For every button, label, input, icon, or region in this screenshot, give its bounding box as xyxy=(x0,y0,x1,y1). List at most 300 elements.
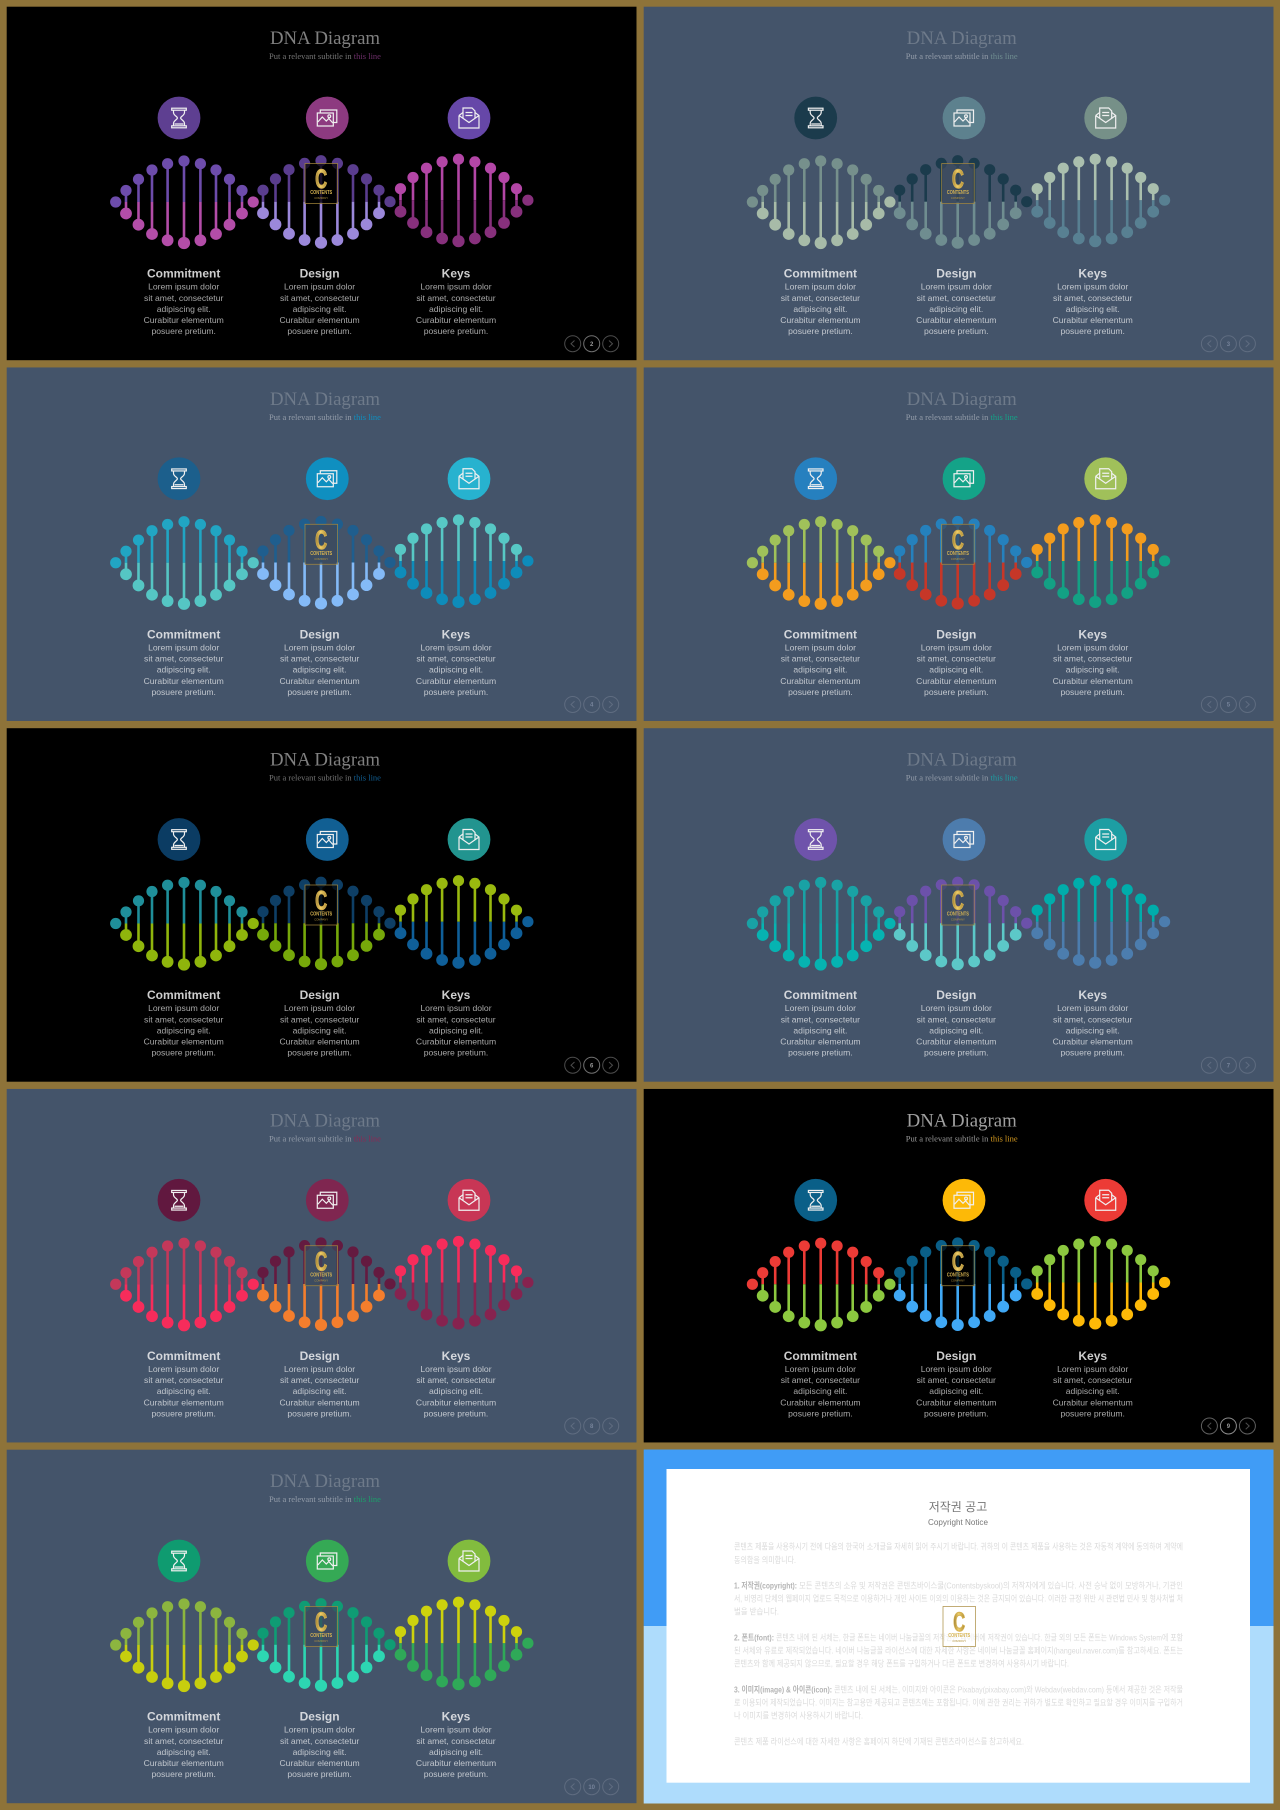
text block: Design: adipiscing elit. xyxy=(293,1747,347,1757)
subtitle: Put a relevant subtitle in this line xyxy=(269,1494,381,1504)
subtitle: Put a relevant subtitle in this line xyxy=(906,1133,1018,1143)
icon: envelope xyxy=(1084,818,1127,861)
text block: Commitment: sit amet, consectetur xyxy=(144,1736,223,1746)
DNA helix 1 xyxy=(110,1238,259,1331)
text block: Keys: sit amet, consectetur xyxy=(1053,293,1132,303)
text block: Keys: adipiscing elit. xyxy=(1066,1386,1120,1396)
text block: Keys: Keys xyxy=(1078,988,1107,1002)
text block: Commitment: Curabitur elementum xyxy=(144,1036,224,1046)
text block: Commitment: Commitment xyxy=(147,988,220,1002)
icon: picture xyxy=(943,457,985,500)
text block: Commitment: adipiscing elit. xyxy=(793,304,847,314)
icon: picture xyxy=(943,97,985,139)
text block: Commitment: Commitment xyxy=(784,1349,857,1363)
subtitle: Put a relevant subtitle in this line xyxy=(906,412,1018,422)
text block: Commitment: Curabitur elementum xyxy=(780,315,861,325)
notice section 3: 3. 이미지(image) & 아이콘(icon): xyxy=(734,1684,832,1694)
notice section 3: 나 이미지를 변경하여 사용하시기 바랍니다. xyxy=(734,1710,863,1720)
subtitle: Put a relevant subtitle in this line xyxy=(269,412,381,422)
text block: Design: sit amet, consectetur xyxy=(917,1014,996,1024)
text block: Commitment: posuere pretium. xyxy=(788,1048,853,1058)
text block: Design: Curabitur elementum xyxy=(916,1036,996,1046)
logo xyxy=(305,885,338,925)
text block: Design: adipiscing elit. xyxy=(929,1386,983,1396)
text block: Commitment: Commitment xyxy=(147,266,220,280)
text block: Keys: Keys xyxy=(442,1349,471,1363)
text block: Commitment: Commitment xyxy=(147,1710,220,1724)
panel: copyright notice xyxy=(644,1450,1274,1804)
icon: picture xyxy=(306,1540,349,1582)
panel: purple on black xyxy=(7,7,636,360)
DNA helix 3 xyxy=(1031,1236,1170,1330)
DNA helix 3 xyxy=(395,1597,534,1690)
text block: Design: Design xyxy=(936,266,976,280)
notice sheet xyxy=(666,1469,1250,1783)
subtitle: Put a relevant subtitle in this line xyxy=(269,51,381,61)
text block: Keys: posuere pretium. xyxy=(424,326,488,336)
text block: Design: sit amet, consectetur xyxy=(280,1736,359,1746)
page navigation: 2 xyxy=(590,342,594,348)
text block: Commitment: Curabitur elementum xyxy=(780,676,861,686)
text block: Design: posuere pretium. xyxy=(287,687,352,697)
text block: Design: adipiscing elit. xyxy=(929,304,983,314)
DNA helix 1 xyxy=(747,877,896,971)
text block: Keys: Keys xyxy=(442,1710,471,1724)
text block: Commitment xyxy=(780,266,861,336)
text block: Keys: Keys xyxy=(1078,1349,1107,1363)
text block: Keys: Keys xyxy=(1078,266,1107,280)
text block: Keys: Lorem ipsum dolor xyxy=(420,1364,492,1374)
text block: Keys: Lorem ipsum dolor xyxy=(1057,282,1128,292)
text block: Design: adipiscing elit. xyxy=(293,304,347,314)
text block: Commitment: adipiscing elit. xyxy=(793,1025,847,1035)
text block: Design xyxy=(279,266,360,336)
icon: hourglass xyxy=(794,97,837,139)
logo xyxy=(943,1606,976,1646)
subtitle: Put a relevant subtitle in this line xyxy=(269,772,381,782)
text block: Keys: Curabitur elementum xyxy=(1053,1397,1133,1407)
text block: Keys: Curabitur elementum xyxy=(1053,315,1133,325)
icon: envelope xyxy=(1084,97,1127,139)
text block: Keys xyxy=(1053,627,1133,697)
text block: Keys: Curabitur elementum xyxy=(416,315,496,325)
page navigation xyxy=(1201,696,1255,712)
icon: hourglass xyxy=(158,457,200,500)
text block: Keys: Curabitur elementum xyxy=(416,676,496,686)
text block: Commitment: Lorem ipsum dolor xyxy=(785,1003,856,1013)
page navigation xyxy=(1201,1418,1255,1434)
text block: Commitment: Commitment xyxy=(784,988,857,1002)
subtitle: Put a relevant subtitle in this line xyxy=(269,1133,381,1143)
icon: hourglass xyxy=(794,457,837,500)
text block: Design xyxy=(916,266,996,336)
text block: Design: sit amet, consectetur xyxy=(280,293,359,303)
DNA helix 2 xyxy=(894,155,1032,249)
page navigation xyxy=(565,1057,619,1073)
DNA helix 3 xyxy=(1031,514,1170,608)
text block: Keys: adipiscing elit. xyxy=(1066,304,1120,314)
text block: Design: sit amet, consectetur xyxy=(917,293,996,303)
page navigation xyxy=(565,336,619,352)
text block: Keys: posuere pretium. xyxy=(424,1769,488,1779)
text block: Design: Design xyxy=(300,988,340,1002)
notice section 1: 모든 콘텐츠의 소유 및 저작권은 콘텐츠바이스쿨(Contentsbyskool)의 저작자에게 있습니다. 사전 승낙 없이 모방하거나, 기관인 xyxy=(799,1581,1183,1591)
text block: Keys: sit amet, consectetur xyxy=(1053,654,1132,664)
text block: Commitment: adipiscing elit. xyxy=(793,665,847,675)
page navigation: 4 xyxy=(590,703,594,709)
text block: Commitment xyxy=(144,1710,224,1779)
text block: Keys: sit amet, consectetur xyxy=(416,1375,496,1385)
notice section 2: 2. 폰트(font): xyxy=(734,1632,774,1642)
text block: Design: adipiscing elit. xyxy=(929,1025,983,1035)
text block: Keys: Keys xyxy=(442,627,471,641)
DNA helix 2 xyxy=(894,516,1032,610)
notice section 1 xyxy=(734,1581,1183,1617)
title: DNA Diagram xyxy=(907,389,1017,410)
text block: Design: adipiscing elit. xyxy=(293,1025,347,1035)
panel: cyan on slate xyxy=(7,367,636,721)
text block: Design: Design xyxy=(300,266,340,280)
title: DNA Diagram xyxy=(270,389,380,410)
logo xyxy=(305,1246,338,1286)
text block: Design: posuere pretium. xyxy=(287,326,352,336)
text block: Commitment xyxy=(144,266,224,336)
icon: envelope xyxy=(448,1540,490,1582)
text block: Design xyxy=(279,1349,360,1418)
notice intro: 콘텐츠 제품을 사용하시기 전에 다음의 한국어 소개글을 자세히 읽어 주시기 바랍니다. 귀하의 이 콘텐츠 제품을 사용하는 것은 자동적 계약에 동의하여 계약에 xyxy=(734,1542,1183,1552)
notice section 2 xyxy=(734,1632,1183,1668)
DNA helix 2 xyxy=(894,877,1032,970)
DNA helix 1 xyxy=(110,155,259,249)
text block: Keys: posuere pretium. xyxy=(424,1048,488,1058)
text block: Design xyxy=(916,1349,996,1418)
text block: Design: posuere pretium. xyxy=(924,687,989,697)
logo xyxy=(942,885,974,925)
text block: Keys: Lorem ipsum dolor xyxy=(420,1725,492,1735)
notice title: 저작권 공고 xyxy=(929,1500,987,1514)
text block: Design: sit amet, consectetur xyxy=(280,1375,359,1385)
text block: Commitment: sit amet, consectetur xyxy=(144,654,223,664)
text block: Keys: Lorem ipsum dolor xyxy=(420,282,492,292)
text block: Keys: Curabitur elementum xyxy=(416,1758,496,1768)
text block: Keys xyxy=(416,1349,496,1418)
icon: picture xyxy=(306,457,349,500)
text block: Design: Curabitur elementum xyxy=(916,315,996,325)
title: DNA Diagram xyxy=(270,1110,380,1131)
DNA helix 1 xyxy=(747,516,896,610)
text block: Design: posuere pretium. xyxy=(287,1408,352,1418)
text block: Commitment: Lorem ipsum dolor xyxy=(785,1364,856,1374)
text block: Design: posuere pretium. xyxy=(924,326,989,336)
icon: picture xyxy=(943,818,985,861)
text block: Design: sit amet, consectetur xyxy=(280,654,359,664)
DNA helix 2 xyxy=(257,877,396,970)
text block: Keys: Curabitur elementum xyxy=(1053,676,1133,686)
text block: Commitment: Lorem ipsum dolor xyxy=(148,1003,219,1013)
text block: Design: posuere pretium. xyxy=(924,1408,989,1418)
text block: Design xyxy=(279,627,360,697)
text block: Commitment xyxy=(780,1349,861,1418)
text block: Commitment: posuere pretium. xyxy=(151,1048,216,1058)
text block: Keys: Curabitur elementum xyxy=(416,1397,496,1407)
text block: Commitment xyxy=(144,627,224,697)
logo xyxy=(942,524,974,564)
text block: Keys: adipiscing elit. xyxy=(429,1025,483,1035)
logo xyxy=(942,1246,974,1286)
text block: Keys: sit amet, consectetur xyxy=(1053,1014,1132,1024)
text block: Commitment: Curabitur elementum xyxy=(780,1397,861,1407)
page navigation: 8 xyxy=(590,1424,594,1430)
text block: Keys: posuere pretium. xyxy=(1060,687,1125,697)
page navigation: 10 xyxy=(588,1785,596,1791)
page navigation: 6 xyxy=(590,1063,594,1069)
text block: Design: Lorem ipsum dolor xyxy=(921,1003,992,1013)
text block: Design: Design xyxy=(300,1349,340,1363)
notice intro xyxy=(734,1542,1183,1565)
DNA helix 3 xyxy=(395,514,534,608)
icon: envelope xyxy=(448,1179,490,1222)
text block: Keys xyxy=(416,627,496,697)
icon: hourglass xyxy=(158,97,200,139)
text block: Keys xyxy=(1053,1349,1133,1418)
text block: Keys: adipiscing elit. xyxy=(429,1747,483,1757)
text block: Keys: Lorem ipsum dolor xyxy=(1057,1364,1128,1374)
text block: Design: Design xyxy=(936,627,976,641)
text block: Commitment: adipiscing elit. xyxy=(157,1386,211,1396)
text block: Commitment: adipiscing elit. xyxy=(157,1025,211,1035)
title: DNA Diagram xyxy=(907,1110,1017,1131)
text block: Keys: Lorem ipsum dolor xyxy=(420,642,492,652)
icon: picture xyxy=(943,1179,985,1222)
DNA helix 1 xyxy=(110,516,259,610)
logo xyxy=(305,524,338,564)
panel: teal and lime on black xyxy=(7,728,636,1082)
text block: Keys xyxy=(1053,988,1133,1058)
title: DNA Diagram xyxy=(907,28,1017,49)
text block: Design xyxy=(279,988,360,1058)
text block: Keys xyxy=(1053,266,1133,336)
icon: hourglass xyxy=(158,818,200,861)
icon: hourglass xyxy=(158,1540,200,1582)
page navigation xyxy=(1201,1057,1255,1073)
text block: Commitment: posuere pretium. xyxy=(151,1408,216,1418)
page navigation xyxy=(1201,336,1255,352)
text block: Keys: Curabitur elementum xyxy=(416,1036,496,1046)
text block: Commitment: Commitment xyxy=(147,627,220,641)
text block: Commitment: sit amet, consectetur xyxy=(144,1375,223,1385)
text block: Commitment: Curabitur elementum xyxy=(780,1036,861,1046)
text block: Design: adipiscing elit. xyxy=(293,665,347,675)
text block: Design: Design xyxy=(300,1710,340,1724)
text block: Commitment: posuere pretium. xyxy=(151,687,216,697)
title: DNA Diagram xyxy=(907,750,1017,770)
notice section 2: 콘텐츠 내에 된 서체는, 한글 폰트는 네이버 나눔글꼴의 저작권은 네이버에 저작권이 있습니다. 한글 외의 모든 폰트는 Windows System에 포함 xyxy=(776,1632,1183,1642)
icon: hourglass xyxy=(158,1179,200,1222)
text block: Commitment: Lorem ipsum dolor xyxy=(148,282,219,292)
subtitle: Put a relevant subtitle in this line xyxy=(906,772,1018,782)
text block: Commitment: sit amet, consectetur xyxy=(144,293,223,303)
text block: Commitment: posuere pretium. xyxy=(788,326,853,336)
text block: Keys xyxy=(416,1710,496,1779)
page navigation xyxy=(565,1418,619,1434)
text block: Commitment: posuere pretium. xyxy=(151,1769,216,1779)
text block: Keys: sit amet, consectetur xyxy=(416,1014,496,1024)
text block: Design: Lorem ipsum dolor xyxy=(284,1725,355,1735)
text block: Keys: Lorem ipsum dolor xyxy=(1057,642,1128,652)
title: DNA Diagram xyxy=(270,1471,380,1492)
text block: Commitment: posuere pretium. xyxy=(151,326,216,336)
DNA helix 3 xyxy=(1031,154,1170,247)
page navigation xyxy=(565,1779,619,1795)
text block: Design: sit amet, consectetur xyxy=(917,654,996,664)
notice subtitle: Copyright Notice xyxy=(928,1517,988,1527)
text block: Keys xyxy=(416,266,496,336)
text block: Keys: Keys xyxy=(442,988,471,1002)
text block: Commitment: sit amet, consectetur xyxy=(144,1014,223,1024)
icon: picture xyxy=(306,1179,349,1222)
notice section 1: 서, 비영리 단체의 웹페이지 업로드 목적으로 이용하거나 개인 사이트 이외의 이용하는 것은 금지되어 있습니다. 이러한 규정 위반 시 관련법 민사 및 형사처벌 처 xyxy=(734,1593,1183,1603)
DNA helix 3 xyxy=(395,154,534,247)
text block: Keys: Curabitur elementum xyxy=(1053,1036,1133,1046)
text block: Commitment: Lorem ipsum dolor xyxy=(148,1364,219,1374)
icon: hourglass xyxy=(794,1179,837,1222)
DNA helix 1 xyxy=(747,155,896,249)
panel: violet and teal on slate xyxy=(644,728,1274,1082)
text block: Commitment xyxy=(780,627,861,697)
text block: Commitment: sit amet, consectetur xyxy=(781,1014,860,1024)
page navigation: 5 xyxy=(1227,703,1231,709)
DNA helix 1 xyxy=(110,1598,259,1692)
text block: Design: Design xyxy=(300,627,340,641)
text block: Keys: posuere pretium. xyxy=(1060,1408,1125,1418)
text block: Keys: adipiscing elit. xyxy=(1066,665,1120,675)
text block: Keys: sit amet, consectetur xyxy=(416,293,496,303)
icon: picture xyxy=(306,818,349,861)
text block: Design: Lorem ipsum dolor xyxy=(284,642,355,652)
logo xyxy=(305,1606,338,1646)
text block: Design: sit amet, consectetur xyxy=(917,1375,996,1385)
DNA helix 1 xyxy=(747,1238,896,1331)
text block: Commitment: Commitment xyxy=(147,1349,220,1363)
text block: Commitment: adipiscing elit. xyxy=(157,1747,211,1757)
text block: Design: Lorem ipsum dolor xyxy=(921,642,992,652)
text block: Design: adipiscing elit. xyxy=(293,1386,347,1396)
text block: Commitment: Curabitur elementum xyxy=(144,315,224,325)
text block: Commitment: adipiscing elit. xyxy=(157,304,211,314)
DNA helix 3 xyxy=(1031,875,1170,969)
text block: Design: posuere pretium. xyxy=(287,1048,352,1058)
notice section 3: 로 이용되어 제작되었습니다. 이미지는 참고용만 제공되고 콘텐츠에는 포함됩니다. 이에 관한 권리는 귀하가 별도로 확인하고 필요할 경우 이미지를 구입하거 xyxy=(734,1698,1183,1708)
DNA helix 2 xyxy=(894,1237,1032,1331)
icon: envelope xyxy=(448,818,490,861)
notice section 3: 콘텐츠 내에 된 서체는, 이미지와 아이콘은 Pixabay(pixabay.com)와 Webdav(webdav.com) 등에서 제공한 것은 저작물 xyxy=(834,1684,1183,1694)
text block: Keys: posuere pretium. xyxy=(424,1408,488,1418)
notice section 2: 콘텐츠와 함께 제공되지 않으므로, 필요할 경우 해당 폰트를 구입하거나 다른 폰트로 변경하여 사용하시기 바랍니다. xyxy=(734,1658,1069,1668)
panel: green on slate xyxy=(7,1450,636,1803)
notice section 2: 된 서체와 유료로 제작되었습니다. 네이버 나눔글꼴 라이선스에 대한 자세한 사항은 네이버 나눔글꼴 홈페이지(hangeul.naver.com)를 참고하세요. 폰트는 xyxy=(734,1646,1183,1656)
text block: Design: Lorem ipsum dolor xyxy=(284,1003,355,1013)
text block: Design: Curabitur elementum xyxy=(916,1397,996,1407)
DNA helix 2 xyxy=(257,1237,396,1331)
text block: Keys: Keys xyxy=(1078,627,1107,641)
page navigation: 7 xyxy=(1227,1063,1231,1069)
icon: hourglass xyxy=(794,818,837,861)
text block: Design: Lorem ipsum dolor xyxy=(284,282,355,292)
text block: Keys: posuere pretium. xyxy=(1060,326,1125,336)
panel: sage on slate xyxy=(644,7,1274,360)
text block: Keys: adipiscing elit. xyxy=(429,304,483,314)
text block: Keys: sit amet, consectetur xyxy=(1053,1375,1132,1385)
text block: Commitment xyxy=(780,988,861,1058)
text block: Design: Curabitur elementum xyxy=(916,676,996,686)
icon: envelope xyxy=(1084,1179,1127,1222)
text block: Keys: sit amet, consectetur xyxy=(416,654,496,664)
page navigation xyxy=(565,696,619,712)
text block: Design: Curabitur elementum xyxy=(279,676,360,686)
title: DNA Diagram xyxy=(270,28,380,49)
text block: Commitment: adipiscing elit. xyxy=(157,665,211,675)
icon: envelope xyxy=(448,97,490,139)
text block: Commitment: posuere pretium. xyxy=(788,1408,853,1418)
text block: Commitment: adipiscing elit. xyxy=(793,1386,847,1396)
text block: Commitment: Curabitur elementum xyxy=(144,676,224,686)
text block: Keys: posuere pretium. xyxy=(424,687,488,697)
text block: Keys: Lorem ipsum dolor xyxy=(420,1003,492,1013)
logo xyxy=(942,164,974,204)
text block: Commitment: sit amet, consectetur xyxy=(781,293,860,303)
text block: Keys: Keys xyxy=(442,266,471,280)
title: DNA Diagram xyxy=(270,750,380,770)
text block: Commitment: Curabitur elementum xyxy=(144,1397,224,1407)
icon: envelope xyxy=(448,457,490,500)
text block: Design: Design xyxy=(936,988,976,1002)
DNA helix 3 xyxy=(395,1236,534,1330)
DNA helix 3 xyxy=(395,875,534,969)
text block: Design: sit amet, consectetur xyxy=(280,1014,359,1024)
text block: Commitment: Commitment xyxy=(784,627,857,641)
panel: primary colours on black xyxy=(644,1089,1274,1442)
text block: Design: adipiscing elit. xyxy=(929,665,983,675)
notice section 3 xyxy=(734,1684,1183,1720)
notice intro: 동의함을 의미합니다. xyxy=(734,1555,796,1565)
text block: Keys: adipiscing elit. xyxy=(1066,1025,1120,1035)
DNA helix 2 xyxy=(257,155,396,249)
text block: Design xyxy=(279,1710,360,1779)
text block: Keys: Lorem ipsum dolor xyxy=(1057,1003,1128,1013)
text block: Design: Lorem ipsum dolor xyxy=(921,1364,992,1374)
text block: Keys: sit amet, consectetur xyxy=(416,1736,496,1746)
text block: Commitment xyxy=(144,1349,224,1418)
text block: Design: Curabitur elementum xyxy=(279,1036,360,1046)
text block: Commitment: Lorem ipsum dolor xyxy=(148,642,219,652)
text block: Design: Lorem ipsum dolor xyxy=(921,282,992,292)
text block: Design: Design xyxy=(936,1349,976,1363)
text block: Keys: adipiscing elit. xyxy=(429,665,483,675)
text block: Design: Curabitur elementum xyxy=(279,1758,360,1768)
text block: Commitment: Lorem ipsum dolor xyxy=(148,1725,219,1735)
DNA helix 2 xyxy=(257,1598,396,1692)
text block: Commitment: Curabitur elementum xyxy=(144,1758,224,1768)
text block: Keys: adipiscing elit. xyxy=(429,1386,483,1396)
text block: Design: Curabitur elementum xyxy=(279,1397,360,1407)
text block: Keys xyxy=(416,988,496,1058)
page navigation: 3 xyxy=(1227,342,1231,348)
notice closing line: 콘텐츠 제품 라이선스에 대한 자세한 사항은 홈페이지 하단에 기재된 콘텐츠라이선스를 참고하세요. xyxy=(734,1737,1024,1747)
DNA helix 1 xyxy=(110,877,259,971)
text block: Design: Curabitur elementum xyxy=(279,315,360,325)
DNA helix 2 xyxy=(257,516,396,610)
text block: Commitment: posuere pretium. xyxy=(788,687,853,697)
